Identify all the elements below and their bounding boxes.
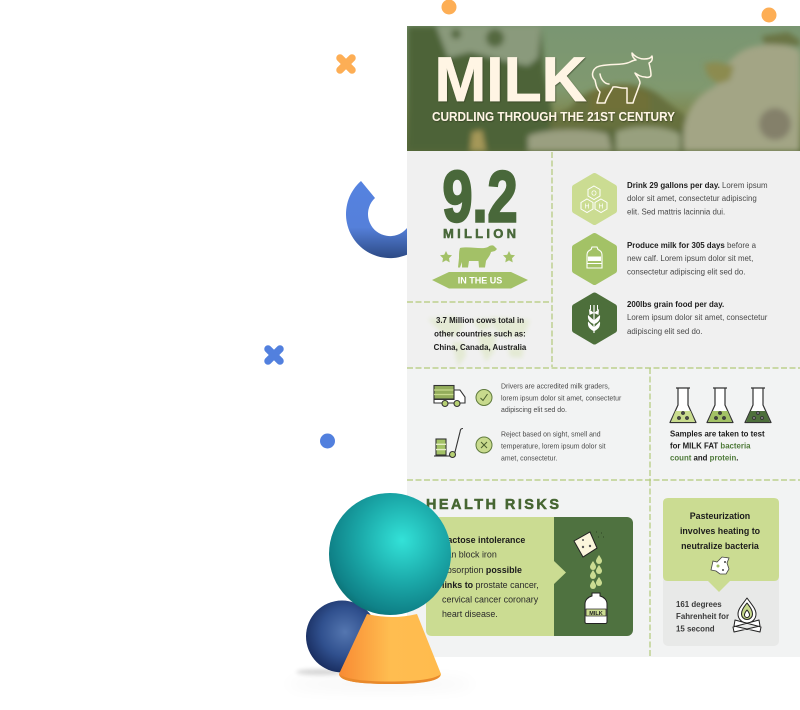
fact: drink: dolor sit amet, consectetur adipiscing bbox=[627, 194, 757, 203]
fact: drink: elit. Sed mattris lacinnia dui. bbox=[627, 208, 725, 216]
text: pasteurization: Pasteurization bbox=[690, 511, 750, 521]
text: risks: cervical cancer coronary bbox=[442, 594, 539, 604]
text: risks: Lactose intolerance bbox=[442, 535, 525, 545]
icon: star right bbox=[503, 251, 515, 262]
icon: hexagon H2O bbox=[575, 176, 614, 222]
icon: cheese bbox=[574, 532, 604, 557]
text: drivers: lorem ipsum dolor sit amet, consectetur bbox=[501, 396, 622, 402]
icon: flask light bbox=[670, 388, 696, 422]
fact: drink: Drink 29 gallons per day. Lorem ipsum bbox=[627, 181, 768, 190]
text: risks: links to prostate cancer, bbox=[442, 580, 539, 590]
text: temperature: 161 degrees bbox=[676, 600, 722, 609]
text: risks: absorption possible bbox=[442, 565, 522, 575]
facts list bbox=[575, 176, 768, 342]
banner bbox=[432, 272, 528, 288]
banner label: IN THE US bbox=[458, 276, 502, 286]
teal sphere bbox=[329, 493, 451, 615]
light side with arrow bbox=[426, 517, 566, 636]
icon: flask dark bbox=[745, 388, 771, 422]
text: pasteurization: neutralize bacteria bbox=[681, 541, 759, 551]
text: reject: temperature, lorem ipsum dolor sit bbox=[501, 444, 606, 450]
icon: flask medium bbox=[707, 388, 733, 422]
icon: cow outline bbox=[593, 53, 652, 103]
icon: reject mark bbox=[476, 437, 492, 453]
orange cone bbox=[339, 614, 441, 684]
icon: check mark bbox=[476, 390, 492, 406]
icon: truck bbox=[434, 386, 465, 406]
fact: grain: adipiscing elit sed do. bbox=[627, 327, 702, 336]
sphere shadow bbox=[296, 669, 344, 675]
icon: milk bottle bbox=[585, 593, 607, 624]
text: reject: amet, consectetur. bbox=[501, 456, 557, 462]
world map watermark bbox=[428, 316, 530, 367]
text: risks: heart disease. bbox=[442, 609, 498, 619]
text: reject: Reject based on sight, smell and bbox=[501, 432, 601, 438]
ground shadow bbox=[285, 679, 475, 689]
decoration: orange cross bbox=[340, 58, 352, 70]
icon: hexagon H2O: H bbox=[598, 204, 604, 210]
other countries note bbox=[428, 316, 530, 367]
note text: 3.7 Million cows total in bbox=[436, 316, 524, 325]
fact: produce: Produce milk for 305 days before a bbox=[627, 241, 756, 250]
header photo bbox=[407, 26, 800, 151]
illustration: 3D shapes bbox=[285, 493, 475, 689]
fact: grain: Lorem ipsum dolor sit amet, consectetur bbox=[627, 313, 768, 322]
text: temperature: 15 second bbox=[676, 624, 715, 634]
quality checks bbox=[434, 384, 622, 462]
title: MILK: MILK bbox=[434, 45, 586, 115]
decoration: blue cross bbox=[268, 349, 280, 361]
dark side bbox=[540, 517, 633, 636]
icon: cow silhouette bbox=[458, 245, 497, 268]
heading: health risks: HEALTH RISKS bbox=[426, 497, 559, 513]
icon: bacteria bbox=[711, 557, 729, 574]
icon: star left bbox=[440, 251, 452, 262]
decoration: orange dot right bbox=[762, 8, 776, 22]
icon: milk drops bbox=[590, 555, 602, 589]
text: temperature: Fahrenheit for bbox=[676, 612, 729, 621]
word: million: MILLION bbox=[443, 226, 516, 241]
grey lower card bbox=[663, 560, 779, 646]
lab samples bbox=[670, 388, 771, 462]
navy sphere bbox=[306, 600, 378, 672]
fact: produce: consectetur adipiscing elit sed do. bbox=[627, 268, 745, 276]
text: pasteurization: involves heating to bbox=[680, 526, 761, 536]
icon: hexagon milk bag bbox=[575, 236, 614, 282]
header banner bbox=[407, 26, 800, 151]
icon: hexagon wheat bbox=[575, 296, 614, 342]
text: samples: for MILK FAT bacteria bbox=[670, 442, 750, 450]
note text: China, Canada, Australia bbox=[434, 343, 527, 352]
big number: 9.2 bbox=[442, 158, 518, 238]
text: drivers: Drivers are accredited milk graders, bbox=[501, 384, 610, 390]
note text: other countries such as: bbox=[434, 330, 526, 338]
panel: pasteurization bbox=[663, 498, 779, 646]
icon: hand cart bbox=[434, 428, 463, 458]
icon: campfire bbox=[733, 598, 761, 632]
text: drivers: adipiscing elit sed do. bbox=[501, 407, 567, 414]
text: risks: can block iron bbox=[442, 550, 497, 560]
fact: grain: 200lbs grain food per day. bbox=[627, 300, 724, 309]
decoration: orange dot top bbox=[442, 0, 456, 14]
fact: produce: new calf. Lorem ipsum dolor sit met, bbox=[627, 254, 753, 263]
subtitle: CURDLING THROUGH THE 21ST CENTURY bbox=[432, 110, 676, 124]
stat: 9.2 million in the US bbox=[432, 158, 528, 288]
section dividers bbox=[407, 152, 800, 657]
green upper card bbox=[663, 498, 779, 592]
decoration: blue ring arc bbox=[346, 181, 434, 258]
icon: hexagon H2O: O bbox=[591, 190, 597, 198]
icon: hexagon H2O: H bbox=[584, 204, 590, 210]
text: samples: Samples are taken to test bbox=[670, 430, 765, 438]
text: samples: count and protein. bbox=[670, 454, 738, 462]
panel: health risks bbox=[426, 517, 633, 636]
infographic panel background bbox=[407, 151, 800, 657]
icon: milk bottle: MILK bbox=[589, 611, 603, 617]
decoration: blue dot bbox=[320, 434, 335, 448]
